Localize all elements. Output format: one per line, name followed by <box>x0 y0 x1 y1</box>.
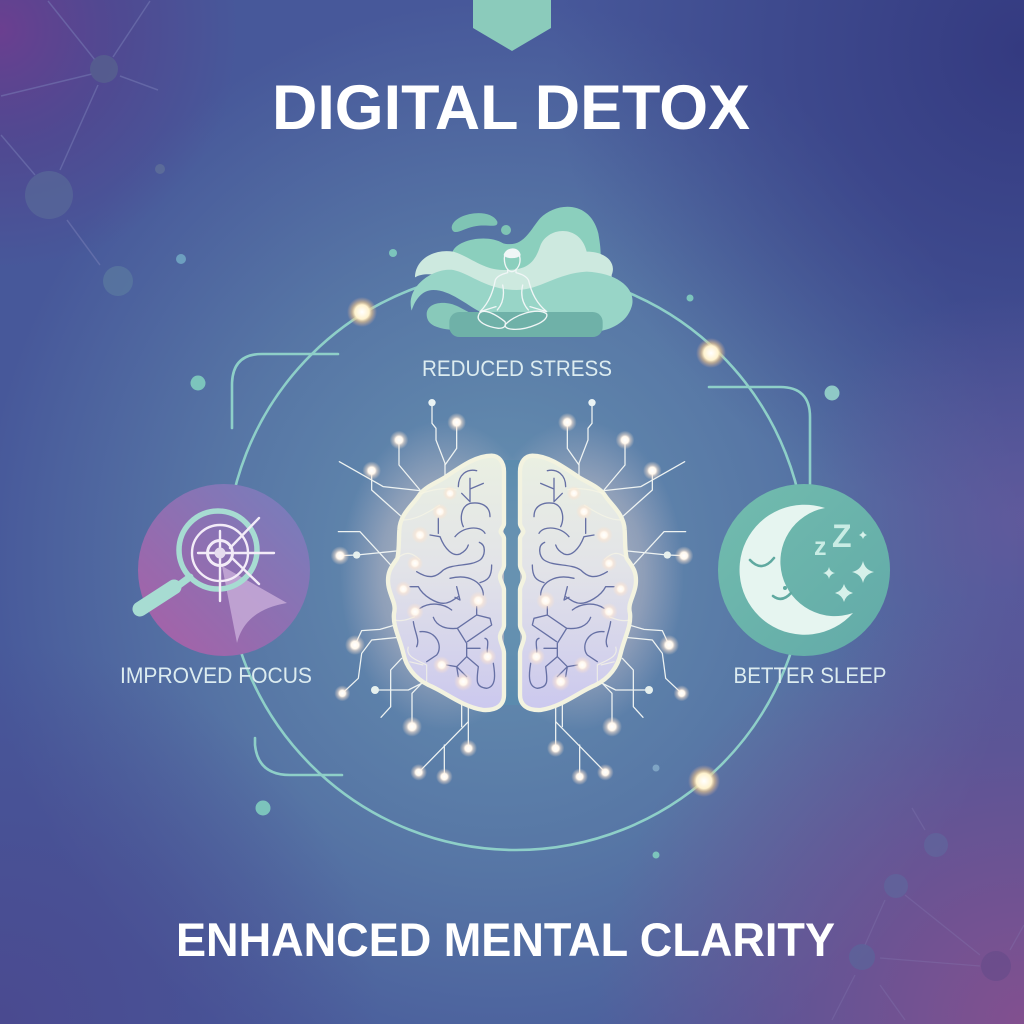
light beam <box>222 566 287 643</box>
label: improved focus: IMPROVED FOCUS <box>120 663 312 688</box>
orbit ring with connectors <box>226 270 810 850</box>
decorative network: bottom right <box>832 808 1024 1020</box>
small floating dots <box>176 249 840 858</box>
bracket: upper right <box>709 387 810 486</box>
stars <box>823 531 874 602</box>
top pentagon tab <box>473 0 551 51</box>
left hemisphere <box>331 399 504 785</box>
magnifier <box>140 511 257 609</box>
bracket: upper left <box>232 354 338 428</box>
right hemisphere <box>520 399 693 785</box>
brain with circuit lines <box>331 399 693 785</box>
icon: improved focus, magnifier over target <box>138 484 310 656</box>
crescent moon with face <box>740 505 853 635</box>
decorative network: top left <box>1 1 165 296</box>
footer heading: ENHANCED MENTAL CLARITY <box>176 913 835 966</box>
label: reduced stress: REDUCED STRESS <box>422 356 612 381</box>
sleep letters: Z <box>832 518 852 554</box>
bracket: lower left <box>255 738 342 775</box>
sleep letters: z <box>814 533 826 561</box>
icon: better sleep, crescent moon <box>718 484 890 656</box>
glowing ring nodes <box>347 297 726 797</box>
icon: reduced stress, meditating figure on cloud <box>411 207 633 337</box>
title: DIGITAL DETOX <box>272 73 750 143</box>
meditating figure <box>478 249 547 329</box>
sleep letters <box>814 518 852 561</box>
label: better sleep: BETTER SLEEP <box>734 663 886 688</box>
crosshair target <box>192 518 274 601</box>
